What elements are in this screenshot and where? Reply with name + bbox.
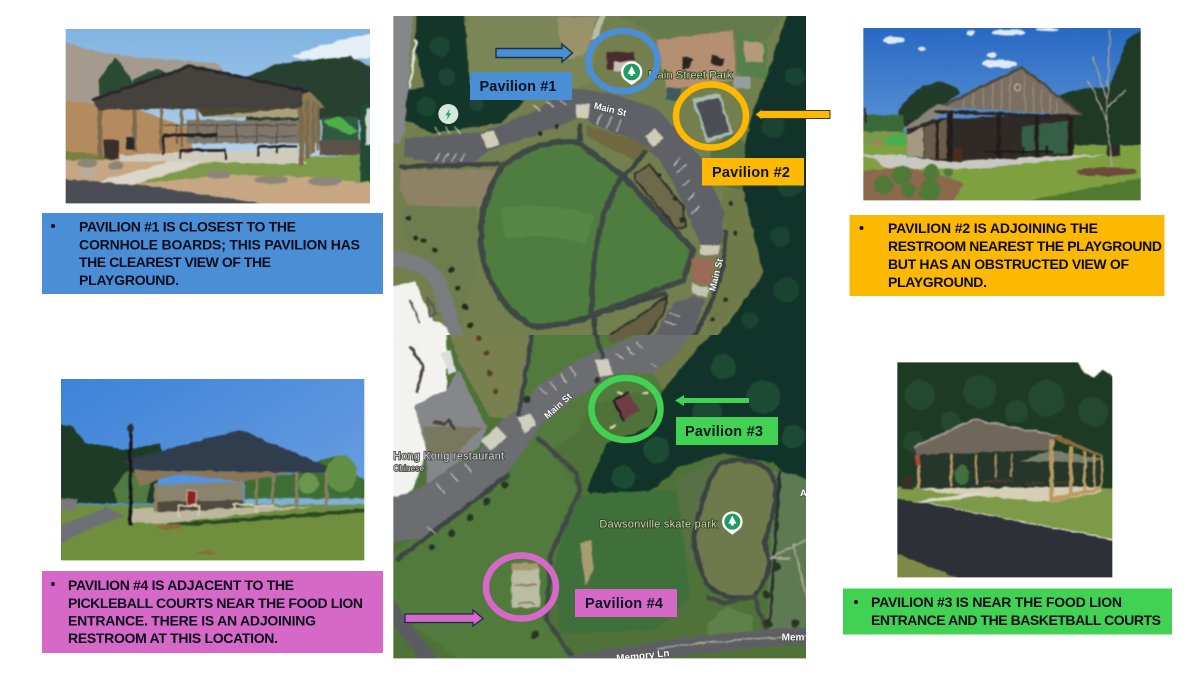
text block: pavilion 2: RESTROOM NEAREST THE PLAYGROUND (888, 238, 1162, 254)
text block: pavilion 4 (42, 571, 383, 653)
map label: Hong Kong restaurant: Hong Kong restaurant (393, 450, 504, 462)
callout: pavilion 2 marker ring (676, 84, 746, 148)
forest (586, 335, 806, 494)
text block: pavilion 1: CORNHOLE BOARDS; THIS PAVILION HAS (79, 236, 360, 252)
icon: park pin (621, 61, 642, 85)
text block: pavilion 2: BUT HAS AN OBSTRUCTED VIEW OF (888, 256, 1129, 272)
callout: pavilion 4 marker ring (486, 556, 556, 618)
callout: pavilion 1 marker ring (588, 31, 658, 91)
text block: pavilion 1 (42, 213, 383, 294)
map label: Main Street Park: Main Street Park (648, 69, 733, 81)
label: Pavilion #1: Pavilion #1 (480, 79, 556, 95)
bullet (51, 582, 55, 586)
pavilion 2 roof (692, 93, 733, 143)
lower left road and building (387, 258, 458, 343)
parking lines (435, 100, 700, 325)
map label: Main St lower: Main St (542, 391, 574, 421)
text block: pavilion 2: PLAYGROUND. (888, 274, 987, 290)
text block: pavilion 1: PLAYGROUND. (79, 272, 179, 288)
bullet (51, 224, 55, 228)
label: Pavilion #4 (575, 589, 677, 617)
arrow: pavilion 3 (675, 395, 749, 406)
text block: pavilion 1: PAVILION #1 IS CLOSEST TO THE (79, 218, 296, 234)
text block: pavilion 1: THE CLEAREST VIEW OF THE (79, 254, 271, 270)
bottom roads (570, 635, 817, 665)
arrow: pavilion 1 (496, 44, 572, 62)
text block: pavilion 2 (850, 215, 1164, 296)
photo: pavilion 4 (61, 379, 364, 560)
map label: Chinese: Chinese (393, 464, 425, 473)
map label: Mem: Mem (782, 633, 805, 644)
arrow: pavilion 2 (755, 109, 830, 120)
icon: charging pin (438, 104, 458, 124)
text block: pavilion 4: PICKLEBALL COURTS NEAR THE FOOD LION (68, 595, 363, 611)
map label: Main St upper: Main St (593, 101, 627, 118)
panel: aerial map (387, 7, 817, 667)
label: Pavilion #2 (702, 158, 804, 186)
text block: pavilion 4: RESTROOM AT THIS LOCATION. (68, 630, 278, 646)
bullet (860, 226, 864, 230)
label: Pavilion #1 (470, 72, 572, 100)
pavilion 3 roof (614, 393, 640, 421)
photo: pavilion 3 (897, 362, 1112, 578)
callout: pavilion 3 marker ring (592, 378, 660, 440)
text block: pavilion 4: ENTRANCE. THERE IS AN ADJOINING (68, 612, 316, 628)
label: Pavilion #3 (676, 417, 778, 445)
pavilion 4 court (512, 568, 540, 608)
map: lower area (387, 327, 817, 667)
text block: pavilion 4: PAVILION #4 IS ADJACENT TO THE (68, 577, 294, 593)
arrow: pavilion 4 (405, 610, 483, 626)
bullet (854, 600, 858, 604)
lawn (481, 141, 693, 327)
text block: pavilion 3: PAVILION #3 IS NEAR THE FOOD LION (871, 594, 1122, 610)
photo: pavilion 2 (863, 28, 1141, 200)
text block: pavilion 3 (843, 588, 1172, 634)
pavilion 1 roof (607, 52, 635, 70)
planting (406, 124, 737, 328)
label: Pavilion #2: Pavilion #2 (712, 165, 790, 181)
paths (537, 437, 767, 663)
map label: A: A (800, 488, 807, 498)
skate park lawn (767, 471, 806, 630)
icon: skate park pin (722, 511, 743, 535)
map: upper area (387, 7, 813, 347)
photo: pavilion 1 (66, 29, 370, 204)
map label: Dawsonville skate park: Dawsonville skate park (599, 518, 717, 530)
map label: Main St right: Main St (707, 258, 725, 292)
map label: Memory Ln: Memory Ln (616, 648, 670, 665)
text block: pavilion 3: ENTRANCE AND THE BASKETBALL COURTS (871, 612, 1161, 628)
label: Pavilion #3: Pavilion #3 (685, 424, 763, 440)
label: Pavilion #4: Pavilion #4 (585, 596, 663, 612)
road (405, 88, 723, 245)
text block: pavilion 2: PAVILION #2 IS ADJOINING THE (888, 220, 1098, 236)
